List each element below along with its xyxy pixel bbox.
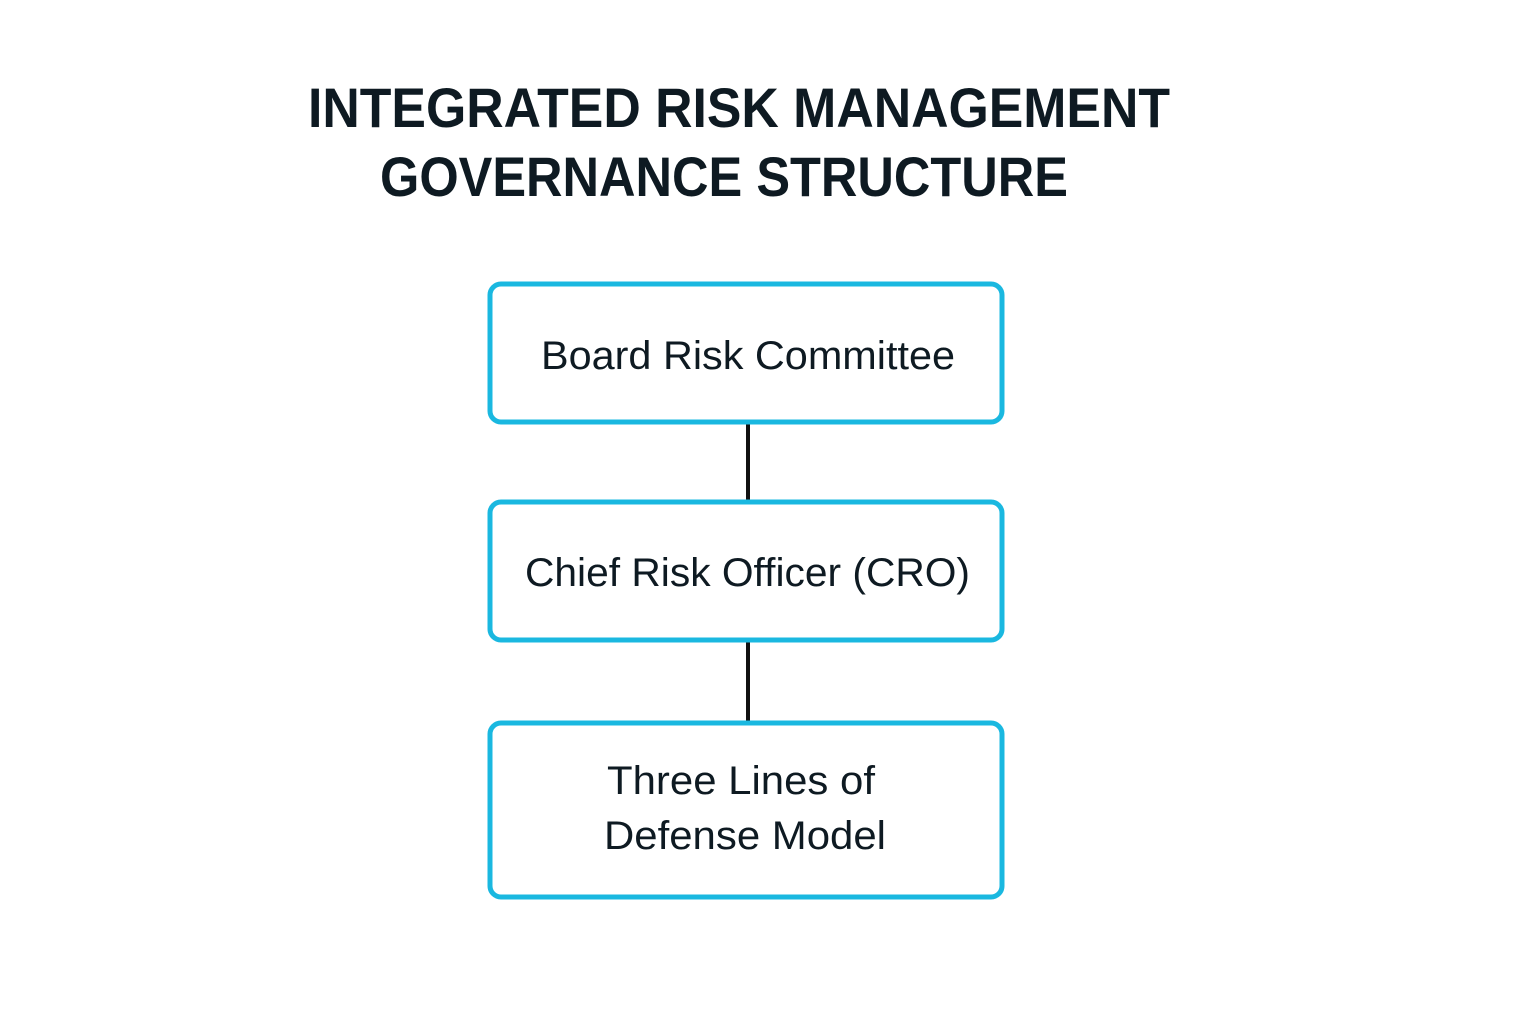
panel: board risk committee: Board Risk Committee [541,334,955,378]
arrow: connector board to CRO [746,424,750,500]
panel: chief risk officer [490,502,1002,640]
panel: three lines of defense model: Defense Model [604,814,886,858]
title [308,76,1170,208]
panel: board risk committee [490,284,1002,422]
panel: three lines of defense model: Three Lines of [607,759,876,803]
panel: three lines of defense model [490,723,1002,897]
title: INTEGRATED RISK MANAGEMENT [308,76,1170,139]
title: GOVERNANCE STRUCTURE [380,145,1068,208]
arrow: connector CRO to three lines [746,642,750,721]
panel: chief risk officer: Chief Risk Officer (CRO) [525,551,970,595]
